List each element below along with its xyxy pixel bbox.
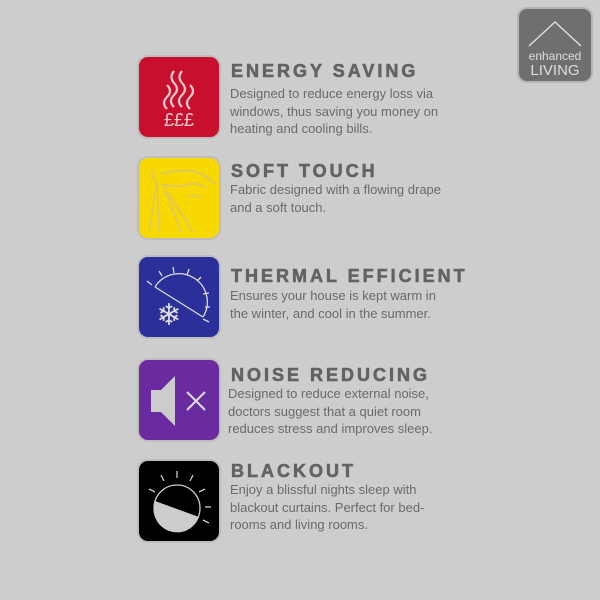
text: noise reducing: doctors suggest that a quiet room <box>228 404 421 418</box>
text: soft touch: and a soft touch. <box>230 200 326 214</box>
text: blackout: blackout curtains. Perfect for bed- <box>230 500 424 514</box>
text: energy saving <box>230 86 438 136</box>
text: noise reducing <box>228 386 432 436</box>
icon: energy saving <box>139 57 219 137</box>
heading: blackout: BLACKOUT <box>231 461 356 481</box>
icon: energy saving: £££ <box>164 110 194 130</box>
icon: soft touch <box>139 158 219 238</box>
heading: thermal efficient: THERMAL EFFICIENT <box>231 266 468 286</box>
text: blackout <box>230 482 424 532</box>
text: blackout: Enjoy a blissful nights sleep with <box>230 482 416 497</box>
text: thermal efficient <box>230 288 436 320</box>
text: blackout: rooms and living rooms. <box>230 517 368 532</box>
icon: thermal efficient: ❄ <box>156 299 182 332</box>
text: energy saving: Designed to reduce energy loss via <box>230 86 433 101</box>
text: energy saving: heating and cooling bills. <box>230 121 372 136</box>
text: soft touch: Fabric designed with a flowing drape <box>230 182 441 197</box>
text: noise reducing: Designed to reduce external noise, <box>228 386 429 401</box>
text: thermal efficient: the winter, and cool in the summer. <box>230 306 431 320</box>
text: noise reducing: reduces stress and improves sleep. <box>228 421 432 436</box>
text: soft touch <box>230 182 441 214</box>
logo: enhanced living: LIVING <box>530 62 580 79</box>
icon: blackout <box>139 461 219 541</box>
icon: thermal efficient <box>139 257 219 337</box>
logo: enhanced living <box>519 9 591 81</box>
text: energy saving: windows, thus saving you money on <box>230 104 438 118</box>
logo: enhanced living: enhanced <box>529 49 581 63</box>
heading: soft touch: SOFT TOUCH <box>231 161 378 181</box>
heading: energy saving: ENERGY SAVING <box>231 61 418 81</box>
heading: noise reducing: NOISE REDUCING <box>231 365 430 385</box>
text: thermal efficient: Ensures your house is kept warm in <box>230 288 436 303</box>
icon: noise reducing <box>139 360 219 440</box>
